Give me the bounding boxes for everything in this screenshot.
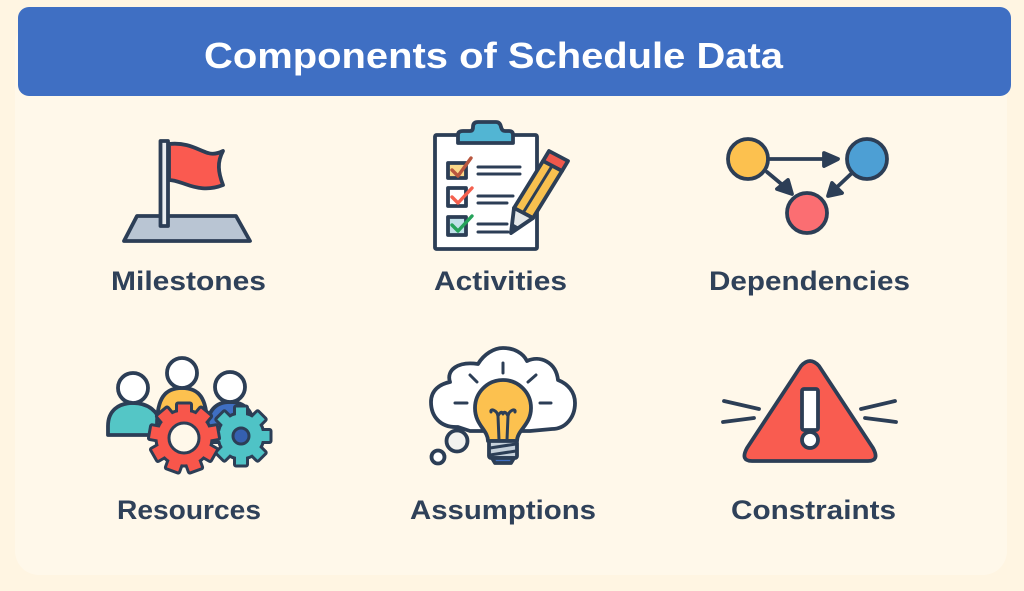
- panel: dependencies: [709, 139, 910, 296]
- icon: teal gear: [211, 406, 271, 466]
- icon: thought cloud with light bulb: [431, 348, 575, 464]
- icon: dependency graph: [728, 139, 887, 233]
- header banner: [18, 7, 1011, 96]
- label: Constraints: Constraints: [731, 495, 896, 525]
- icon: warning triangle: [723, 361, 896, 461]
- title: Components of Schedule Data: [204, 35, 784, 76]
- icon: red gear: [148, 403, 220, 473]
- panel: resources: [108, 358, 271, 525]
- label: Assumptions: Assumptions: [410, 495, 596, 525]
- panel: constraints: [723, 361, 896, 525]
- panel: milestones: [111, 141, 266, 296]
- panel: assumptions: [410, 348, 596, 525]
- icon: flag on base: [124, 141, 250, 241]
- panel: activities: [434, 122, 568, 296]
- icon: people and gears: [108, 358, 271, 473]
- label: Dependencies: Dependencies: [709, 266, 910, 296]
- icon: clipboard and pencil: [435, 122, 568, 249]
- label: Resources: Resources: [117, 495, 261, 525]
- label: Activities: Activities: [434, 266, 567, 296]
- label: Milestones: Milestones: [111, 266, 266, 296]
